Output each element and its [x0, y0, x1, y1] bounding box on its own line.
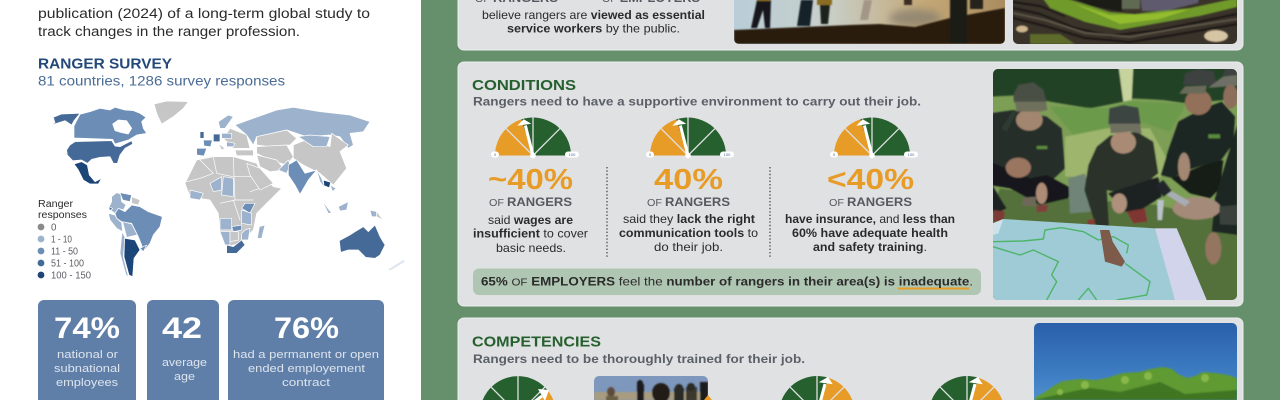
stat: 74%: 74%: [54, 312, 120, 345]
right ranger: [1161, 102, 1235, 178]
alaska: [48, 113, 80, 126]
stat: 74%: subnational: [54, 363, 120, 375]
stat: 76%: had a permanent or open: [233, 349, 379, 361]
new zealand: [388, 260, 405, 271]
stat: communication tools: do their job.: [654, 241, 723, 254]
south america: [108, 193, 162, 277]
world map: [48, 101, 405, 277]
heading: competencies: COMPETENCIES: [472, 334, 601, 350]
stat: 42: age: [174, 371, 195, 383]
stat: insurance: have insurance, and less than: [785, 213, 955, 226]
panel: perception: [458, 0, 1243, 50]
canada: [74, 107, 147, 144]
map legend: responses: [38, 210, 87, 221]
gauge: communication tools: [646, 118, 734, 158]
gauge: insurance: 100: [908, 152, 915, 157]
greenland: [154, 101, 188, 124]
conditions subtitle: Rangers need to have a supportive environment to carry out their job.: [473, 94, 921, 108]
perception text: believe rangers are viewed as essential: [482, 9, 705, 22]
competencies subtitle: Rangers need to be thoroughly trained for their job.: [473, 352, 805, 366]
map legend: 1 - 10: [51, 234, 72, 245]
stat: 76%: 76%: [274, 312, 339, 345]
intro text: track changes in the ranger profession.: [38, 24, 300, 39]
panel: competencies: [458, 318, 1243, 400]
stat: insurance: [785, 164, 955, 254]
photo: rangers reading a map: [990, 65, 1243, 305]
stat: 74%: [38, 300, 136, 400]
map legend: 51 - 100: [51, 258, 85, 269]
stat: 42: [147, 300, 219, 400]
gauge: competency two: [779, 376, 855, 400]
panel: conditions: [458, 62, 1243, 306]
gauge: wages: [491, 118, 579, 158]
perception text: [482, 9, 705, 36]
map legend: 100 - 150: [51, 270, 92, 281]
stat: 42: average: [162, 357, 207, 369]
heading: ranger survey: RANGER SURVEY: [38, 56, 172, 72]
orange marker beside photo: [704, 395, 712, 400]
map legend: 0: [51, 222, 57, 233]
stat: insurance: <40%: [827, 164, 914, 196]
europe: [197, 115, 253, 156]
photo: training group: [594, 376, 708, 400]
stat: wages: [473, 164, 588, 255]
stat: wages: ~40%: [488, 164, 573, 196]
stat: insurance: 60% have adequate health: [792, 227, 948, 240]
stat: 76%: [228, 300, 384, 400]
gauge: communication tools: 100: [724, 152, 731, 157]
gauge: insurance: [830, 118, 918, 158]
callout: employers: 65% OF EMPLOYERS feel the number of rangers in their area(s) is inadequate .: [481, 276, 973, 288]
spread map: [993, 219, 1207, 300]
stat: 74%: employees: [56, 377, 119, 389]
stat: communication tools: [619, 164, 758, 254]
stat: 42: 42: [162, 312, 202, 345]
gauge: communication tools: 0: [649, 152, 652, 157]
africa: [185, 157, 282, 253]
gauge: insurance: 0: [833, 152, 836, 157]
backpack on ground: [1068, 173, 1092, 213]
map legend: [38, 199, 92, 281]
stat: 74%: national or: [57, 349, 118, 361]
perception text: service workers by the public.: [507, 22, 680, 36]
stat: 76%: ended employement: [248, 363, 365, 375]
green background: [421, 0, 1280, 400]
intro text: [38, 6, 370, 39]
photo: forest canopy: [1034, 323, 1237, 400]
map legend: Ranger: [38, 199, 74, 210]
photo: mossy log: [1013, 0, 1237, 44]
usa: [67, 141, 133, 163]
survey size: 81 countries, 1286 survey responses: [38, 74, 285, 88]
gauge: wages: 0: [494, 152, 497, 157]
map legend: 11 - 50: [51, 246, 78, 257]
callout: employers: [473, 268, 981, 295]
stat: communication tools: 40%: [654, 164, 723, 196]
photo: rangers at a wildfire: [734, 0, 1005, 44]
stat: 76%: contract: [282, 377, 330, 389]
intro text: publication (2024) of a long-term global study to: [38, 6, 370, 21]
middle ranger: [1084, 132, 1158, 231]
stat: insurance: and safety training .: [813, 241, 927, 254]
stat: communication tools: said they lack the right: [623, 213, 755, 226]
asia: [235, 107, 383, 220]
mexico: [74, 162, 102, 184]
stat: communication tools: communication tools to: [619, 227, 758, 240]
stat: wages: said wages are: [488, 214, 574, 227]
panel: introduction and survey: [38, 6, 405, 400]
stat: wages: insufficient to cover: [473, 228, 588, 240]
far right ranger: [1212, 125, 1237, 235]
left ranger: [993, 109, 1066, 180]
australia: [339, 225, 385, 258]
gauge: competency one: [480, 376, 556, 400]
stat: wages: OF RANGERS: [489, 195, 572, 209]
stat: wages: basic needs.: [496, 242, 566, 255]
heading: conditions: CONDITIONS: [472, 77, 576, 94]
stat: insurance: OF RANGERS: [829, 195, 912, 209]
gauge: competency three: [929, 376, 1005, 400]
gauge: wages: 100: [569, 152, 576, 157]
stat: communication tools: OF RANGERS: [647, 195, 730, 209]
